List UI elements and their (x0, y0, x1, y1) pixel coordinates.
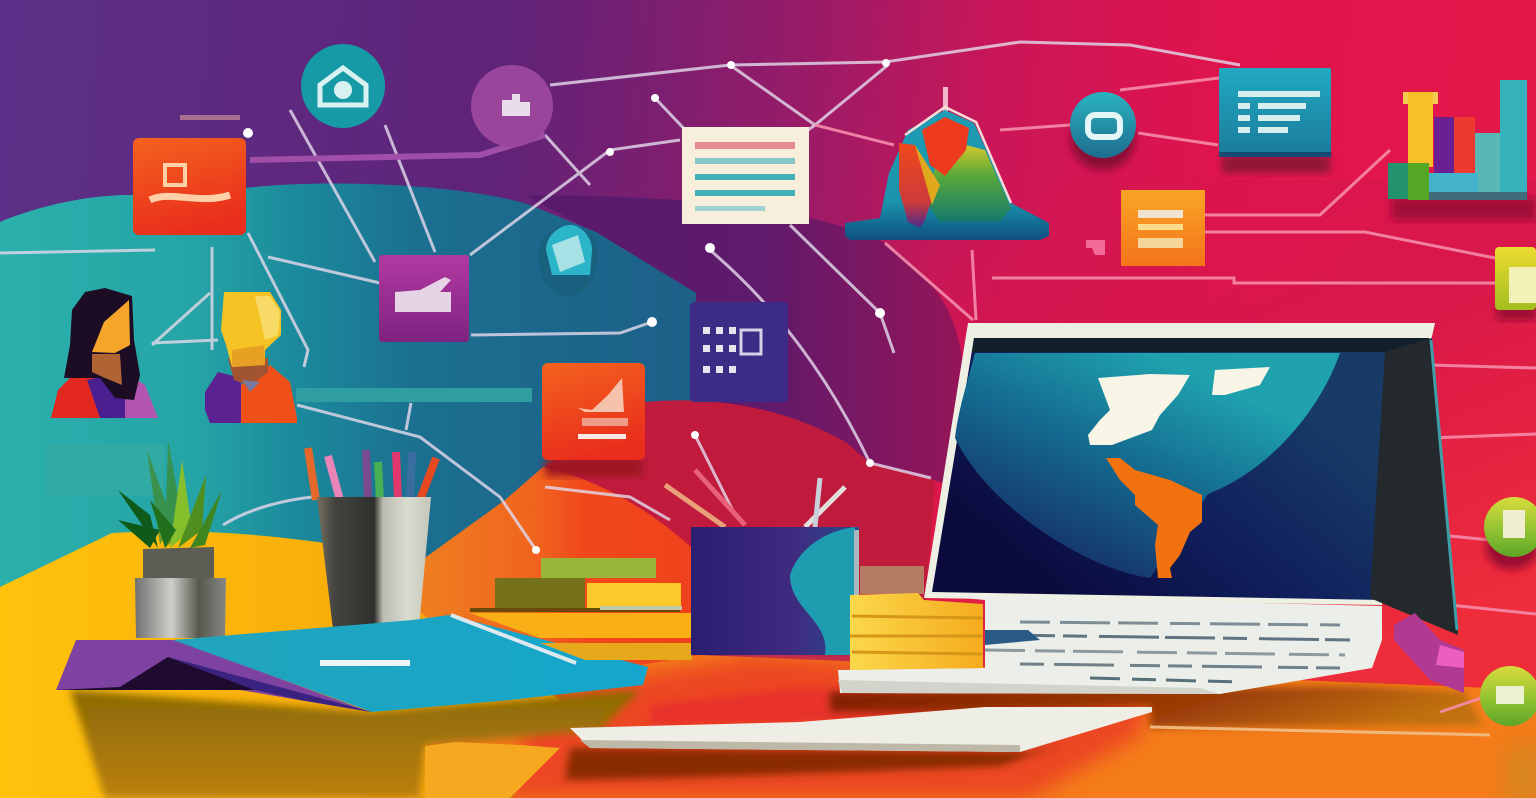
icon: purple circle badge (471, 65, 553, 147)
icon: laptop (838, 323, 1458, 694)
floor red patch (650, 688, 1000, 725)
light yellow wedge (425, 742, 560, 798)
icon: teal circle badge (301, 44, 385, 128)
connector nodes (243, 59, 890, 554)
icon: person man (205, 292, 297, 423)
icon: green dollar badge (1484, 497, 1536, 570)
small pink flag (1086, 240, 1105, 255)
laptop screen bezel (924, 323, 1435, 605)
map south america (1106, 458, 1202, 578)
laptop side panel (1370, 338, 1458, 635)
laptop globe (955, 353, 1340, 578)
panel: purple swoosh (525, 195, 964, 485)
icon: folder on desk (56, 615, 648, 712)
dark under paper (565, 745, 1060, 780)
map north america (1088, 374, 1190, 445)
connector lines pink (815, 78, 1536, 735)
laptop side edge (1431, 340, 1457, 630)
icon: person woman (51, 288, 158, 418)
icon: front sheet of paper (570, 707, 1152, 752)
panel: right red area (880, 180, 1536, 720)
panel: orange list card (1121, 190, 1205, 266)
panel: yellow ground (0, 531, 560, 798)
panel: orange check card (542, 363, 645, 476)
teal band (296, 388, 532, 402)
panel: orange hill (410, 467, 700, 670)
icon: pencil cup (308, 448, 436, 638)
purple band line (250, 135, 545, 160)
panel: teal list card (1219, 68, 1331, 173)
floor bottom right tint (1505, 745, 1536, 798)
chart: mountain peaks (845, 87, 1049, 240)
panel: document card (682, 127, 809, 224)
icon: green badge bottom right (1480, 666, 1536, 726)
icon: green card right edge (1495, 247, 1536, 320)
panel: navy grid card (690, 302, 788, 402)
connector lines pale (0, 42, 1240, 550)
panel: orange floor (420, 655, 1536, 798)
chart: bar chart top right (1388, 80, 1536, 220)
display top band (972, 338, 1429, 352)
panel: purple chart card (379, 255, 469, 342)
icon: coin stack (850, 593, 983, 670)
floor red wash (500, 655, 1150, 798)
tan strip behind coins (860, 566, 924, 594)
panel: orange card (133, 138, 246, 235)
panel: teal and navy blob (0, 183, 696, 600)
icon: blue pencil cup (665, 470, 859, 655)
teal patch (46, 445, 164, 495)
icon: plant in pot (118, 440, 226, 638)
laptop keyboard (838, 595, 1382, 694)
laptop display (932, 338, 1429, 600)
folder shadow on ground (70, 690, 640, 798)
icon: small teal globe badge (538, 225, 598, 297)
map greenland (1212, 367, 1270, 395)
icon: teal chat badge (1070, 92, 1136, 170)
small top bar (180, 115, 240, 120)
panel: red blob (540, 400, 935, 660)
icon: book stack (451, 558, 694, 663)
icon: pink pouch (1394, 613, 1464, 693)
shadow under laptop (830, 686, 1482, 728)
